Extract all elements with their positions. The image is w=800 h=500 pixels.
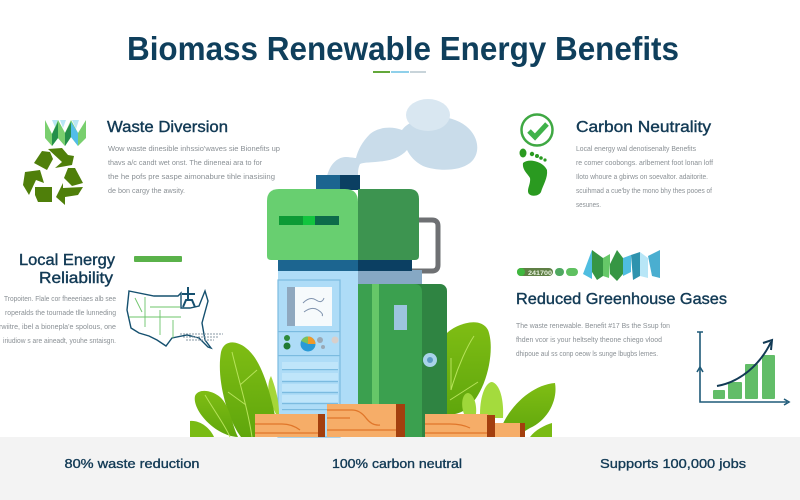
heading: Local Energy xyxy=(19,252,115,269)
icon: zigzag banner xyxy=(45,120,86,146)
icon: check circle xyxy=(522,114,552,146)
body text: Tropoiten. Flale cor fheeeriaes alb see xyxy=(4,296,116,303)
green accent bar xyxy=(134,256,182,262)
body text: re comer coobongs. arlbement foot lonan loff xyxy=(576,160,713,167)
log 4 xyxy=(495,423,525,437)
body text: de bon cargy the awsity. xyxy=(108,188,185,195)
illustration: biomass machine xyxy=(267,175,447,437)
panel: reduced greenhouse gases xyxy=(516,250,789,405)
body text: sesunes. xyxy=(576,202,601,209)
bar chart with rising arrow xyxy=(697,332,789,405)
body band xyxy=(278,260,412,271)
control panel outline xyxy=(278,280,340,437)
illustration: right leaves xyxy=(447,322,556,437)
stat: 100% carbon neutral: 100% carbon neutral xyxy=(332,456,462,471)
control dials xyxy=(284,335,338,352)
stat: 80% waste reduction: 80% waste reduction xyxy=(64,456,200,471)
panel: carbon neutrality xyxy=(520,114,713,209)
body text: rwiitre, ibel a bionepla'e spolous, one xyxy=(0,324,116,331)
heading: Reliability xyxy=(39,270,113,287)
status pills: 241700 xyxy=(528,271,553,277)
body text: dhipoue aul ss conp oeow ls sunge lbugbs lemes. xyxy=(516,351,658,358)
body light blue xyxy=(278,270,358,437)
status pills xyxy=(517,268,578,277)
body text xyxy=(108,146,280,195)
body text xyxy=(516,323,670,358)
display screen xyxy=(287,287,332,326)
body text: the he pofs pre saspe aimonabure tihle inasisiing xyxy=(108,174,275,181)
body text: The waste renewable. Benefit #17 Bs the Ssup fon xyxy=(516,323,670,330)
icon: recycle arrows xyxy=(23,148,83,205)
log 3 xyxy=(425,414,495,437)
title accent bar xyxy=(373,71,426,73)
body text xyxy=(576,146,713,209)
chimney xyxy=(316,175,360,190)
title: Biomass Renewable Energy Benefits xyxy=(127,30,679,67)
illustration: wood logs xyxy=(255,404,525,437)
illustration: left leaves xyxy=(190,342,279,437)
body text: Iloto whoure a gbirws on soevaltor. adaitorite. xyxy=(576,174,708,181)
heading: Carbon Neutrality xyxy=(576,119,711,136)
icon: green footprint xyxy=(520,148,547,196)
icon: zigzag banner xyxy=(583,250,660,281)
body text: iriudiow s are aineadt, youhe sntaisgn. xyxy=(3,338,116,345)
icon: US map xyxy=(127,287,223,348)
heading: Reduced Greenhouse Gases xyxy=(516,291,727,308)
body text: Wow waste dinesible inhssio'waves sie Bionefits up xyxy=(108,146,280,153)
panel: waste diversion xyxy=(23,119,280,205)
body text xyxy=(0,296,116,345)
heading: Waste Diversion xyxy=(107,119,228,136)
lower right door housing xyxy=(358,284,447,437)
body text: thavs a/c candt wet onst. The dineneai ara to for xyxy=(108,160,263,167)
body text: Local energy wal denotisenalty Benefits xyxy=(576,146,696,153)
footer band xyxy=(0,437,800,500)
panel: local energy reliability xyxy=(0,252,223,348)
illustration: smoke cloud xyxy=(327,99,477,176)
heading xyxy=(19,252,115,287)
body text: roperalds the tournade tlle lunneding xyxy=(5,310,116,317)
body text: scuihmad a cue'by the mono bhy thes pooes of xyxy=(576,188,712,195)
grey handle pipe xyxy=(408,220,438,271)
body text: fhden vcor is your heltselty theone chiego vlood xyxy=(516,337,662,344)
log 1 xyxy=(255,414,325,437)
stat: supports 100,000 jobs: Supports 100,000 jobs xyxy=(600,456,747,471)
log 2 xyxy=(327,404,405,437)
vent slats xyxy=(282,362,338,410)
top green hopper xyxy=(267,189,419,260)
